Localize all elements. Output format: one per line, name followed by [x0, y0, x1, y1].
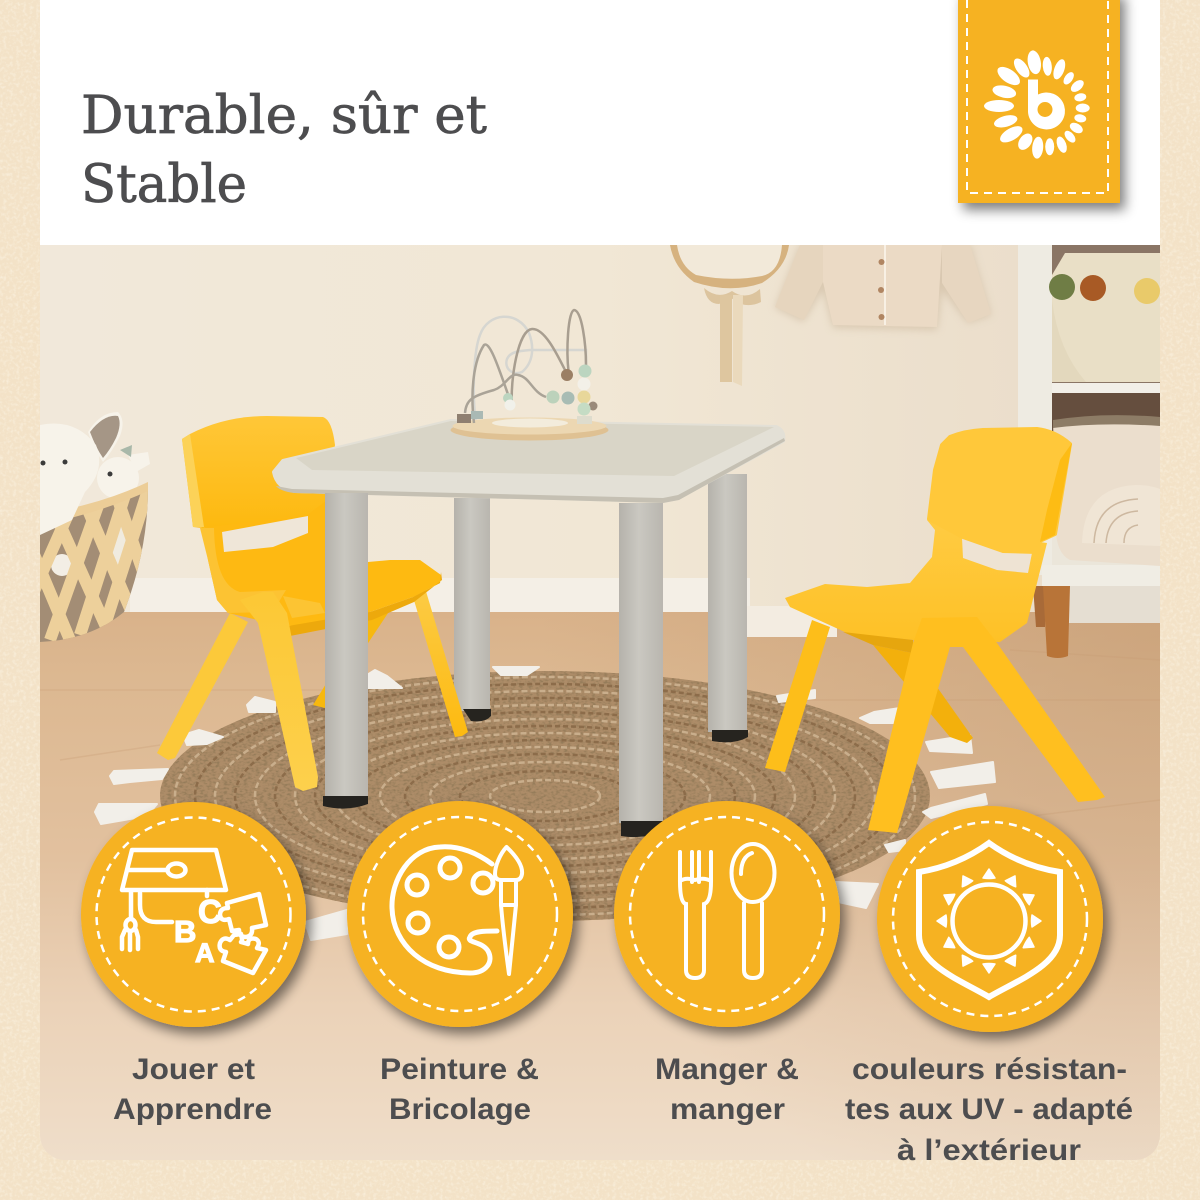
backrest [182, 416, 335, 528]
icon: letters: B [174, 914, 196, 949]
photo: children's table and chairs [30, 245, 1160, 1162]
logo: sunflower b [984, 49, 1090, 159]
backrest cut-out [222, 516, 308, 552]
baseboard [130, 578, 750, 612]
baseboard right of table [747, 606, 837, 637]
shelf unit [1018, 245, 1160, 658]
large plush toy [40, 412, 123, 535]
rug tassels [95, 667, 995, 940]
caption: Peinture & Bricolage: Bricolage [389, 1093, 531, 1126]
caption: Manger & manger [655, 1053, 799, 1126]
small plush toy [97, 445, 150, 499]
right yellow chair [765, 429, 1105, 833]
seat [290, 560, 441, 626]
lower backrest edge [200, 528, 286, 613]
front leg [250, 602, 318, 791]
badge: eating [614, 801, 840, 1027]
caption: UV resistant colours: à l’extérieur [897, 1134, 1081, 1167]
inner back leg [313, 607, 392, 708]
front legs [323, 493, 665, 837]
icon: graduation cap [122, 850, 226, 950]
table top [274, 421, 785, 503]
caption: UV resistant colours: tes aux UV - adapté [845, 1093, 1133, 1126]
caption: UV resistant colours: couleurs résistan- [852, 1053, 1127, 1086]
icon: paint palette [392, 847, 497, 973]
seat front [283, 596, 325, 618]
inner back leg [873, 645, 973, 743]
fabric storage bin with rainbow [1053, 415, 1160, 566]
backrest cut-out [962, 538, 1032, 573]
caption: Jouer et Apprendre: Apprendre [113, 1093, 272, 1126]
left rear leg [157, 613, 248, 760]
back legs of table [454, 474, 748, 742]
wicker basket [30, 482, 148, 642]
seat shade [288, 572, 442, 636]
title: Stable [81, 155, 247, 215]
front legs [868, 617, 1105, 833]
icon: puzzle pieces [220, 894, 266, 973]
caption: Jouer et Apprendre [113, 1053, 272, 1126]
caption: Manger & manger: Manger & [655, 1053, 799, 1086]
backrest side [1040, 443, 1072, 542]
caption: Peinture & Bricolage: Peinture & [380, 1053, 539, 1086]
hanging bonnet [670, 245, 789, 386]
seat and lower backrest [785, 520, 1047, 642]
badge: UV resistant colours [877, 806, 1103, 1032]
caption: UV resistant colours [845, 1053, 1133, 1167]
jute rug [160, 671, 930, 921]
table [274, 421, 785, 837]
icon: spoon [732, 844, 774, 978]
left leg [765, 620, 830, 772]
lower backrest [203, 500, 327, 627]
icon: letters [174, 893, 222, 968]
rope basket with pom-poms [1049, 253, 1160, 382]
icon: shield [919, 843, 1060, 997]
hanging cardigan [775, 245, 991, 330]
floor [40, 612, 1160, 1162]
caption: Peinture & Bricolage [380, 1053, 539, 1126]
badge: play and learn [81, 802, 306, 1027]
icon: letters: A [195, 938, 214, 968]
icon: fork [680, 852, 711, 978]
right front leg [413, 588, 468, 737]
header panel [40, 0, 1160, 246]
backrest [929, 429, 1070, 552]
wall [40, 245, 1042, 612]
bead maze toy [450, 310, 608, 440]
icon: paint brush [495, 847, 522, 974]
caption: Manger & manger: manger [670, 1093, 785, 1126]
backrest side [182, 434, 204, 527]
logo banner [958, 0, 1120, 203]
icon: letters: C [198, 893, 222, 930]
left yellow chair [157, 416, 468, 791]
icon: sun [937, 869, 1041, 973]
caption: Jouer et Apprendre: Jouer et [132, 1053, 255, 1086]
title: Durable, sûr et [81, 86, 487, 146]
seat shade [843, 632, 913, 653]
badge: painting and crafts [347, 801, 573, 1027]
title [81, 86, 487, 215]
